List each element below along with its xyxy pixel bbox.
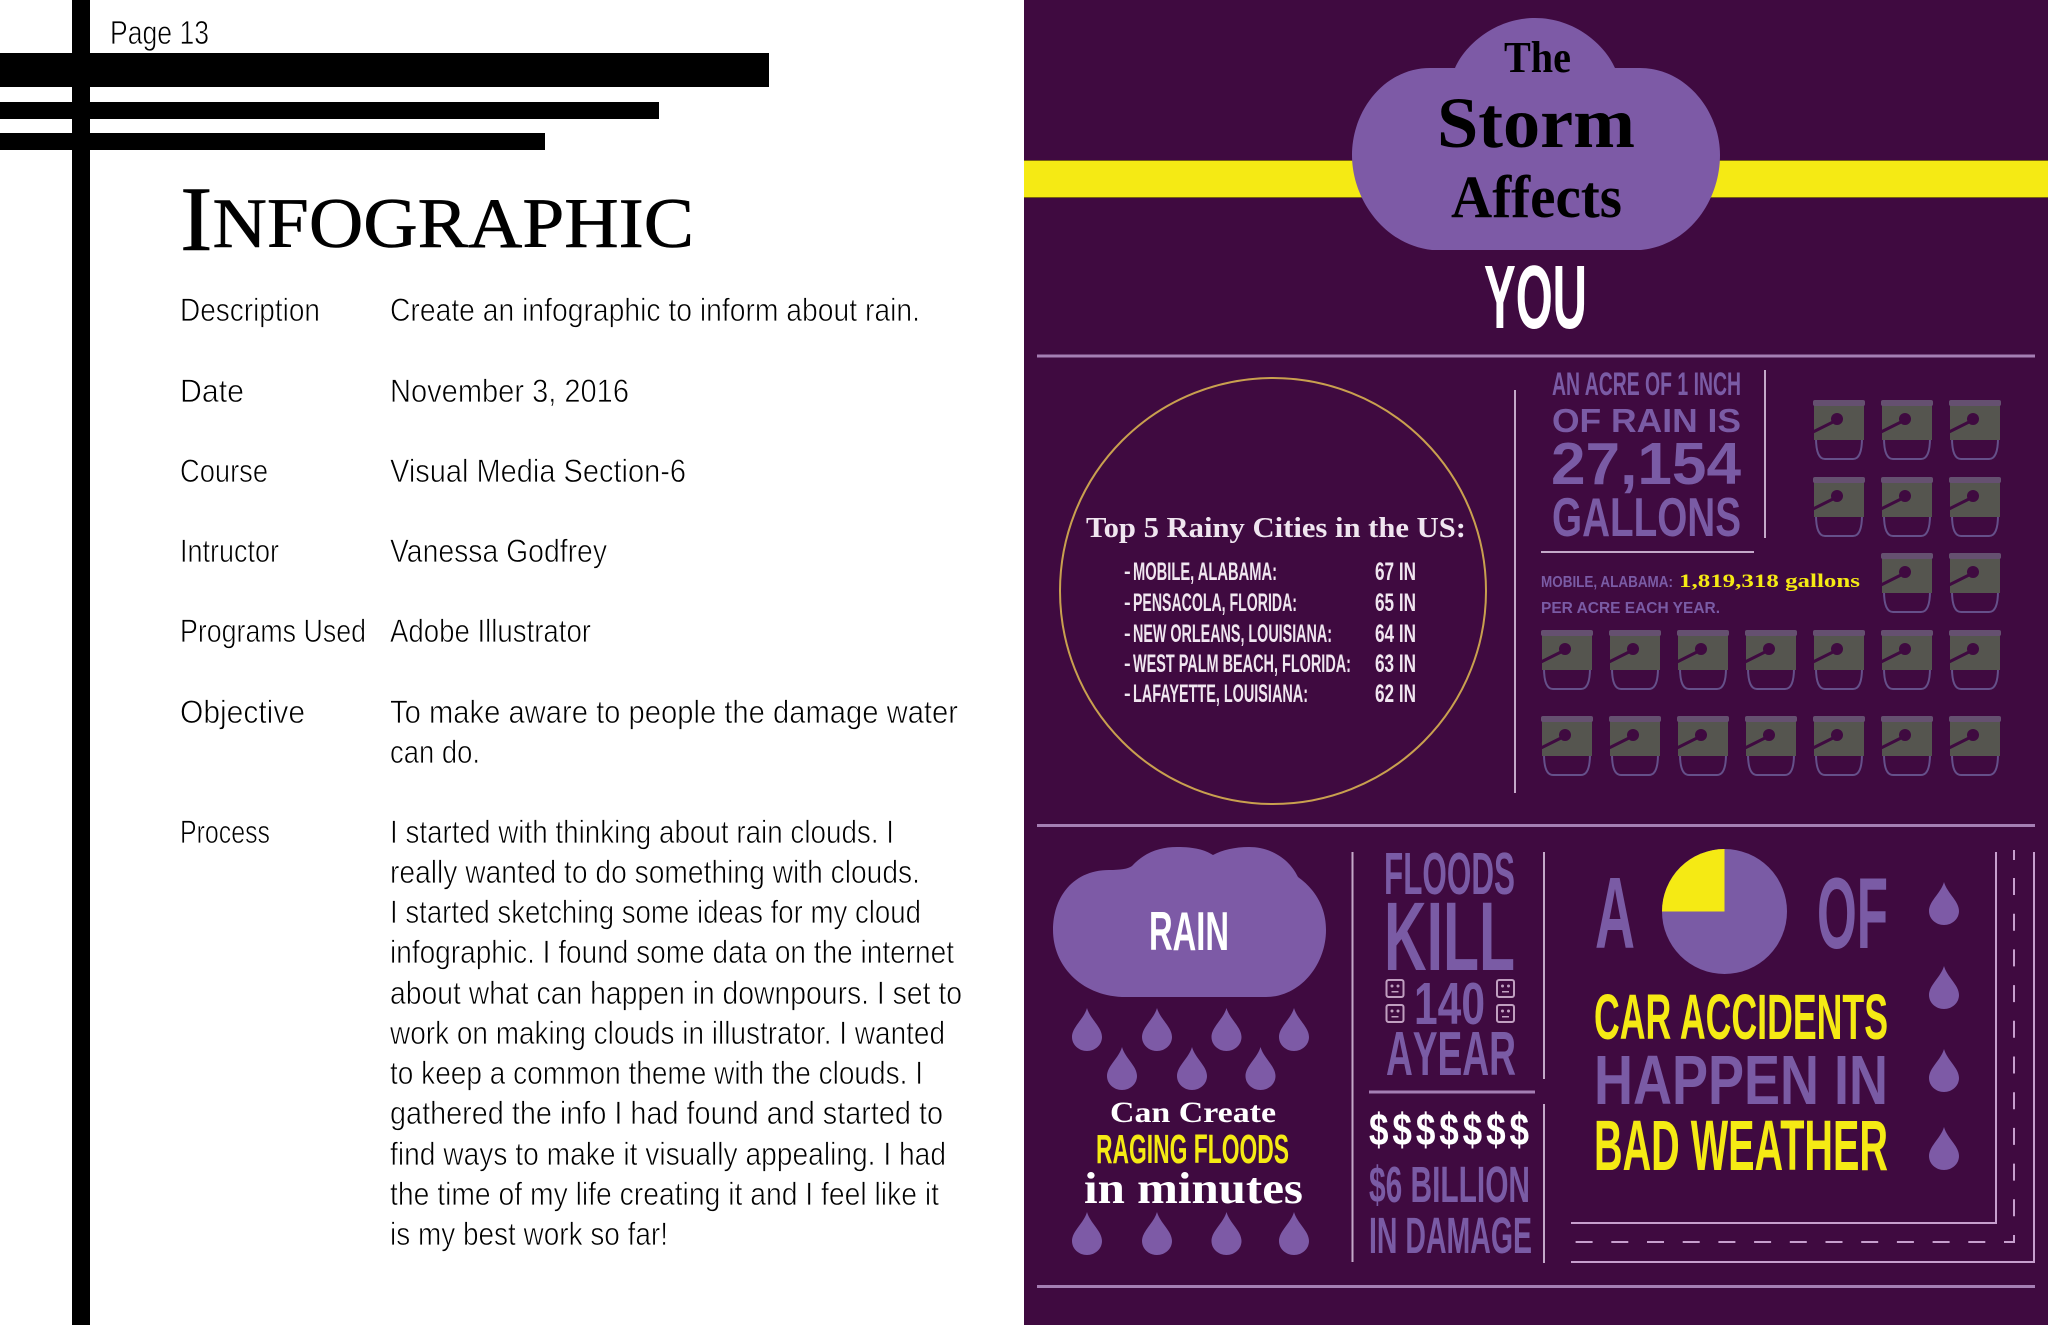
row: instructor: [180, 533, 607, 569]
text block: mobile alabama gallons: [1541, 571, 1860, 617]
row: instructor: Intructor: [180, 533, 279, 569]
row: process: I started sketching some ideas for my cloud: [390, 894, 921, 930]
row: description: Create an infographic to inform about rain.: [390, 292, 920, 328]
text block: floods kill: A YEAR: [1386, 1020, 1516, 1089]
row: process: is my best work so far!: [390, 1216, 668, 1252]
icon grid: buckets: [1541, 400, 2001, 775]
header cloud with title: Affects: [1451, 164, 1622, 230]
row: process: find ways to make it visually appealing. I had: [390, 1136, 946, 1172]
text block: flood damage: $$$$$$$: [1369, 1104, 1533, 1155]
text block: acre of rain: 27,154: [1551, 431, 1741, 497]
row: objective: [180, 694, 958, 770]
text block: floods kill: FLOODS: [1384, 841, 1515, 907]
row: description: Description: [180, 292, 320, 328]
text block: raging floods: in minutes: [1084, 1164, 1303, 1213]
row: course: [180, 453, 686, 489]
panel: left page background: [0, 0, 1024, 1325]
panel: top 5 rainy cities: [1060, 378, 1486, 804]
rain cloud: [1053, 847, 1326, 997]
page number: Page 13: [110, 14, 209, 51]
yellow band: [1024, 160, 2048, 198]
text: A quarter of: A: [1595, 858, 1635, 970]
row: process: I started with thinking about rain clouds. I: [390, 814, 894, 850]
headline word: you: YOU: [1484, 248, 1587, 348]
title: I: [180, 168, 213, 270]
text block: flood damage: IN DAMAGE: [1369, 1207, 1532, 1264]
text block: raging floods: RAGING FLOODS: [1096, 1126, 1289, 1172]
text block: floods kill: [1384, 841, 1516, 1089]
text block: acre of rain: [1551, 366, 1741, 548]
row: process: [180, 814, 962, 1252]
panel: top 5 rainy cities: 64 IN: [1375, 620, 1416, 648]
panel: top 5 rainy cities: LAFAYETTE, LOUISIANA:: [1133, 680, 1308, 708]
row: objective: can do.: [390, 734, 480, 770]
text block: car accidents: HAPPEN IN: [1594, 1041, 1888, 1119]
row: objective: To make aware to people the damage water: [390, 694, 958, 730]
header cloud with title: The: [1504, 33, 1571, 82]
panel: top 5 rainy cities: -: [1124, 592, 1131, 614]
row: process: really wanted to do something with clouds.: [390, 854, 920, 890]
row: course: Visual Media Section-6: [390, 453, 686, 489]
panel: top 5 rainy cities: WEST PALM BEACH, FLORIDA:: [1133, 650, 1351, 678]
row: date: Date: [180, 373, 244, 409]
text block: flood damage: $6 BILLION: [1369, 1156, 1530, 1213]
title: NFOGRAPHIC: [213, 185, 694, 263]
panel: top 5 rainy cities: 63 IN: [1375, 650, 1416, 678]
row: process: gathered the info I had found and started to: [390, 1095, 943, 1131]
panel: top 5 rainy cities: -: [1124, 561, 1131, 583]
panel: top 5 rainy cities: Top 5 Rainy Cities in the US:: [1086, 512, 1466, 544]
text block: acre of rain: OF RAIN IS: [1552, 402, 1741, 439]
header cloud with title: [1352, 18, 1720, 250]
raindrops right column: [1929, 882, 1959, 1170]
panel: top 5 rainy cities: NEW ORLEANS, LOUISIANA:: [1133, 620, 1332, 648]
text: A quarter of: [1595, 858, 1888, 970]
text block: mobile alabama gallons: 1,819,318 gallons: [1679, 571, 1860, 592]
row: process: infographic. I found some data on the internet: [390, 934, 954, 970]
panel: top 5 rainy cities: 62 IN: [1375, 680, 1416, 708]
text block: mobile alabama gallons: MOBILE, ALABAMA:: [1541, 574, 1673, 591]
text block: floods kill: KILL: [1384, 882, 1515, 991]
text block: mobile alabama gallons: PER ACRE EACH YEAR.: [1541, 600, 1720, 617]
raindrops under cloud: [1072, 1008, 1309, 1255]
icons: faces: [1386, 980, 1514, 1022]
text block: flood damage: [1369, 1104, 1533, 1264]
rain cloud: RAIN: [1149, 900, 1229, 962]
text block: car accidents: [1594, 981, 1888, 1186]
panel: top 5 rainy cities: -: [1124, 653, 1131, 675]
row: process: the time of my life creating it and I feel like it: [390, 1176, 939, 1212]
row: programs used: Adobe Illustrator: [390, 613, 591, 649]
row: process: to keep a common theme with the clouds. I: [390, 1055, 923, 1091]
row: objective: Objective: [180, 694, 305, 730]
panel: infographic background: [1024, 0, 2048, 1325]
panel: top 5 rainy cities: -: [1124, 623, 1131, 645]
row: process: work on making clouds in illustrator. I wanted: [389, 1015, 945, 1051]
text block: acre of rain: AN ACRE OF 1 INCH: [1552, 366, 1741, 402]
text: A quarter of: OF: [1817, 858, 1888, 970]
pie chart: one quarter: [1662, 849, 1787, 974]
panel: top 5 rainy cities: 67 IN: [1375, 558, 1416, 586]
decorative header bars: [0, 0, 769, 1325]
row: date: [180, 373, 629, 409]
row: programs used: Programs Used: [180, 613, 366, 649]
panel: top 5 rainy cities: -: [1124, 683, 1131, 705]
panel: top 5 rainy cities: MOBILE, ALABAMA:: [1133, 558, 1277, 586]
row: instructor: Vanessa Godfrey: [390, 533, 607, 569]
row: programs used: [180, 613, 591, 649]
panel: top 5 rainy cities: PENSACOLA, FLORIDA:: [1133, 589, 1297, 617]
panel: top 5 rainy cities: 65 IN: [1375, 589, 1416, 617]
text block: raging floods: [1084, 1096, 1303, 1213]
text block: raging floods: Can Create: [1110, 1096, 1276, 1129]
row: process: Process: [180, 814, 270, 850]
row: date: November 3, 2016: [390, 373, 629, 409]
row: description: [180, 292, 920, 328]
row: course: Course: [180, 453, 268, 489]
text block: acre of rain: GALLONS: [1552, 486, 1741, 548]
text block: project details: [180, 292, 962, 1252]
row: process: about what can happen in downpours. I set to: [390, 975, 962, 1011]
header cloud with title: Storm: [1437, 83, 1635, 163]
text block: floods kill: 140: [1414, 971, 1485, 1037]
